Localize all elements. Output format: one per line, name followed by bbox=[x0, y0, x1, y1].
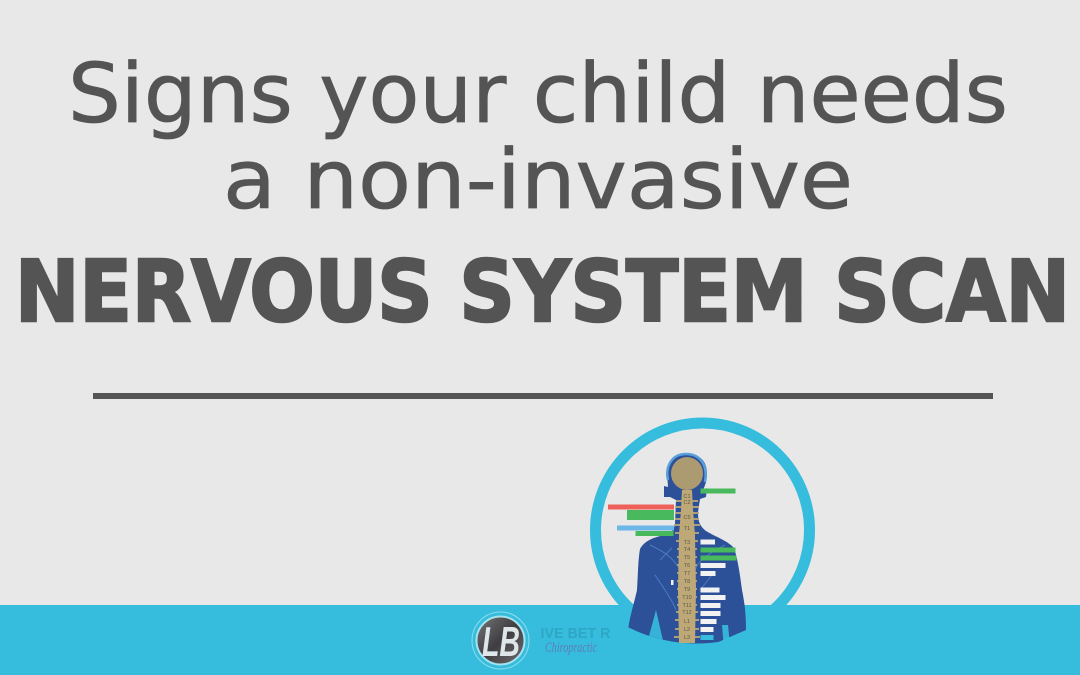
scan bars left bbox=[608, 504, 674, 536]
scan bars right bbox=[671, 488, 736, 640]
vertebra labels: T8 bbox=[684, 579, 690, 585]
logo wordmark: IVE BET R bbox=[540, 625, 611, 642]
band overlap inside ring bbox=[618, 605, 787, 646]
badge ring bbox=[596, 423, 810, 637]
vertebra labels: L1 bbox=[684, 619, 690, 625]
vertebra labels: T7 bbox=[684, 571, 690, 577]
title bbox=[15, 47, 1070, 342]
green bar bbox=[700, 488, 736, 494]
vertebra labels: T6 bbox=[684, 563, 690, 569]
vertebra labels: T1 bbox=[684, 526, 690, 532]
green bar bbox=[700, 556, 736, 560]
vertebra labels: C1 bbox=[683, 494, 691, 500]
arm gaps bbox=[649, 610, 663, 640]
body silhouette bbox=[628, 454, 746, 650]
vertebra labels: T9 bbox=[684, 587, 690, 593]
vertebra labels: T12 bbox=[682, 610, 692, 616]
red bar bbox=[608, 504, 674, 510]
logo emblem bbox=[472, 612, 529, 669]
logo script: Chiropractic bbox=[545, 640, 597, 656]
vertebra labels bbox=[682, 494, 692, 641]
vertebra labels: T5 bbox=[684, 555, 690, 561]
vertebra labels: C2 bbox=[683, 500, 691, 506]
brain bbox=[671, 457, 703, 490]
vertebra labels: T4 bbox=[684, 547, 690, 553]
logo monogram: LB bbox=[482, 618, 520, 665]
divider rule bbox=[93, 393, 993, 399]
scan badge bbox=[596, 423, 810, 650]
vertebra labels: L2 bbox=[684, 627, 690, 633]
cyan bar bbox=[700, 635, 714, 640]
green bar bbox=[636, 531, 674, 536]
vertebra labels: T3 bbox=[684, 540, 690, 546]
blue bar bbox=[617, 526, 674, 530]
green bar bbox=[627, 510, 674, 520]
green bar bbox=[700, 548, 736, 552]
logo bbox=[472, 612, 611, 669]
title line 1: Signs your child needs bbox=[68, 47, 1008, 142]
vertebra labels: C5 bbox=[683, 515, 691, 521]
vertebra labels: L3 bbox=[684, 635, 690, 641]
white bars bbox=[671, 540, 726, 632]
title line 2: a non-invasive bbox=[223, 133, 853, 228]
footer band bbox=[0, 605, 1080, 675]
spine bbox=[674, 490, 700, 643]
vertebra labels: T11 bbox=[682, 603, 692, 609]
vertebra labels: T10 bbox=[682, 595, 692, 601]
